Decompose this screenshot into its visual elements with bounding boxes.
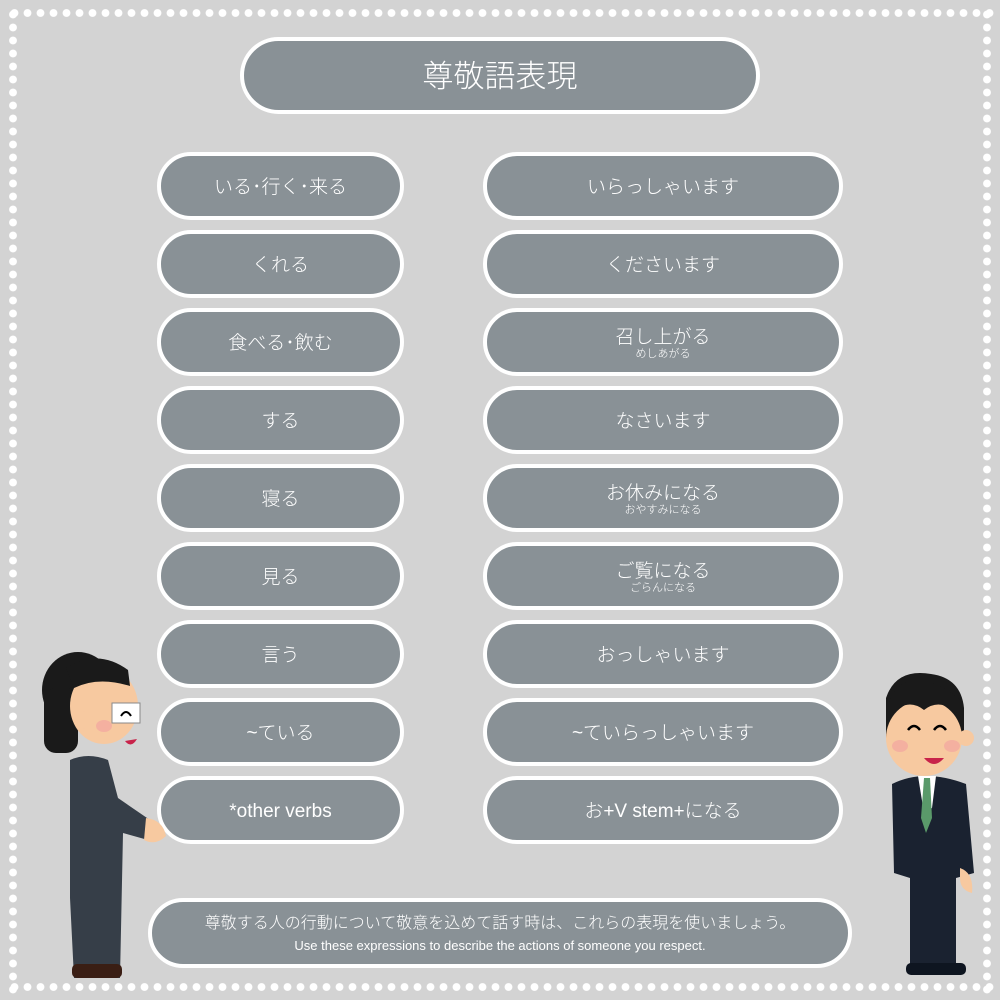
verb: suru [157, 386, 404, 454]
honorific: o+V stem: お+V stem+になる [584, 801, 742, 822]
honorific: teirasshaimasu: ~ていらっしゃいます [572, 723, 754, 744]
honorific: teirasshaimasu [483, 698, 843, 766]
honorific: meshiagaru: めしあがる [636, 348, 690, 360]
verb: miru [157, 542, 404, 610]
honorific: irasshaimasu: いらっしゃいます [587, 177, 739, 198]
bottom note: 尊敬する人の行動について敬意を込めて話す時は、これらの表現を使いましょう。 [205, 915, 795, 932]
honorific: osshaimasu [483, 620, 843, 688]
honorific: kudasaimasu: くださいます [606, 255, 720, 276]
panel: honorific forms [483, 152, 843, 844]
verb: taberu: 食べる･飲む [228, 333, 333, 354]
honorific: oyasumininaru: お休みになる [606, 483, 720, 504]
icon: right man (standing) [886, 673, 974, 975]
icon: left man (gesturing) [42, 652, 166, 978]
honorific: goranninaru: ごらんになる [630, 582, 696, 594]
title: 尊敬語表現 [422, 59, 578, 94]
honorific: nasaimasu: なさいます [615, 411, 710, 432]
verb: neru [157, 464, 404, 532]
title [240, 37, 760, 114]
verb: miru: 見る [261, 567, 300, 588]
honorific: goranninaru: ご覧になる [615, 561, 710, 582]
honorific: irasshaimasu [483, 152, 843, 220]
honorific: o+V stem [483, 776, 843, 844]
verb: teiru: ~ている [246, 723, 315, 744]
verb: iu [157, 620, 404, 688]
verb: iu: 言う [261, 645, 300, 666]
honorific: nasaimasu [483, 386, 843, 454]
honorific: meshiagaru: 召し上がる [615, 327, 710, 348]
honorific: oyasumininaru [483, 464, 843, 532]
honorific: meshiagaru [483, 308, 843, 376]
panel: plain verbs [157, 152, 404, 844]
bottom note: Use these expressions to describe the actions of someone you respect. [294, 938, 706, 953]
bottom note [148, 898, 852, 968]
verb: taberu [157, 308, 404, 376]
honorific: goranninaru [483, 542, 843, 610]
verb: other [157, 776, 404, 844]
verb: iru: いる･行く･来る [214, 177, 347, 198]
honorific: oyasumininaru: おやすみになる [624, 504, 702, 516]
verb: suru: する [261, 411, 300, 432]
honorific: kudasaimasu [483, 230, 843, 298]
verb: other: *other verbs [229, 801, 332, 822]
verb: iru [157, 152, 404, 220]
verb: kureru [157, 230, 404, 298]
honorific: osshaimasu: おっしゃいます [596, 645, 730, 666]
verb: kureru: くれる [252, 255, 309, 276]
verb: neru: 寝る [261, 489, 300, 510]
verb: teiru [157, 698, 404, 766]
